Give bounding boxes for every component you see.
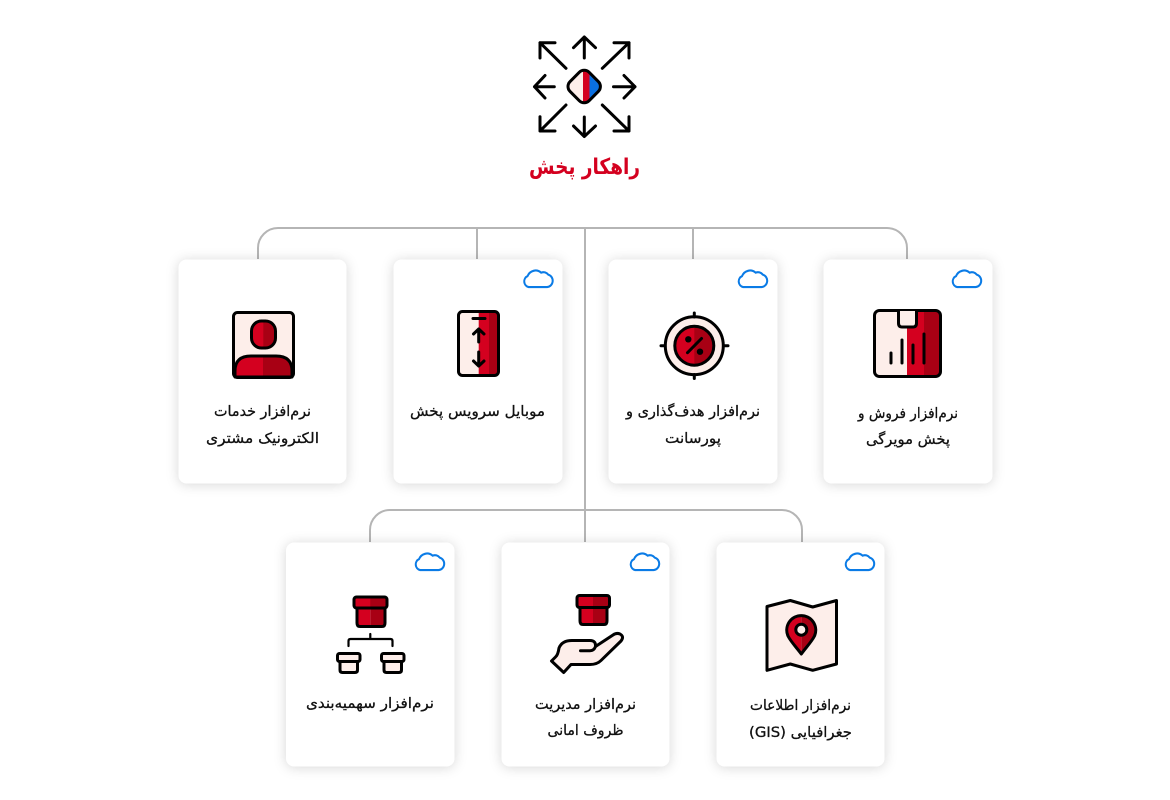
label: موبایل سرویس پخش	[410, 404, 545, 420]
icon: phone with arrows	[458, 312, 498, 376]
card: targeting and commission software: پورسانت	[665, 431, 721, 447]
icon: user portrait	[234, 312, 294, 378]
card: distribution sales software: پخش مویرگی	[866, 431, 950, 448]
icon: box with chart	[874, 310, 940, 376]
card: custody container management	[502, 542, 670, 766]
label: نرم‌افزار خدمات	[214, 404, 311, 420]
icon: cloud	[739, 271, 767, 287]
label: نرم‌افزار هدف‌گذاری و	[625, 403, 760, 420]
label: نرم‌افزار سهمیه‌بندی	[306, 696, 434, 712]
label: نرم‌افزار فروش و	[857, 406, 958, 422]
card: distribution sales software	[824, 260, 992, 484]
label: نرم‌افزار اطلاعات	[750, 698, 851, 714]
card: GIS software	[716, 542, 884, 766]
icon: central distribution arrows	[534, 37, 635, 136]
card: customer e-services software	[178, 260, 346, 484]
icon: cloud	[631, 554, 659, 570]
card: GIS software: جغرافیایی (GIS)	[749, 725, 852, 741]
label: نرم‌افزار مدیریت	[535, 697, 636, 713]
connector lines	[258, 228, 907, 542]
icon: cloud	[524, 271, 553, 287]
icon: cloud	[953, 271, 981, 287]
title: راهکار پخش	[529, 155, 640, 180]
card: targeting and commission software	[608, 260, 778, 484]
icon: map with pin	[767, 600, 836, 670]
icon: cloud	[846, 554, 874, 570]
icon: hand holding container	[552, 596, 623, 672]
icon: cloud	[416, 554, 444, 570]
card: allocation software	[286, 542, 454, 766]
icon: target with percent	[661, 313, 728, 378]
card: customer e-services software: الکترونیک مشتری	[206, 431, 319, 447]
icon: allocation tree of containers	[338, 597, 404, 672]
card: mobile distribution service	[394, 260, 562, 484]
card: custody container management: ظروف امانی	[548, 723, 624, 739]
